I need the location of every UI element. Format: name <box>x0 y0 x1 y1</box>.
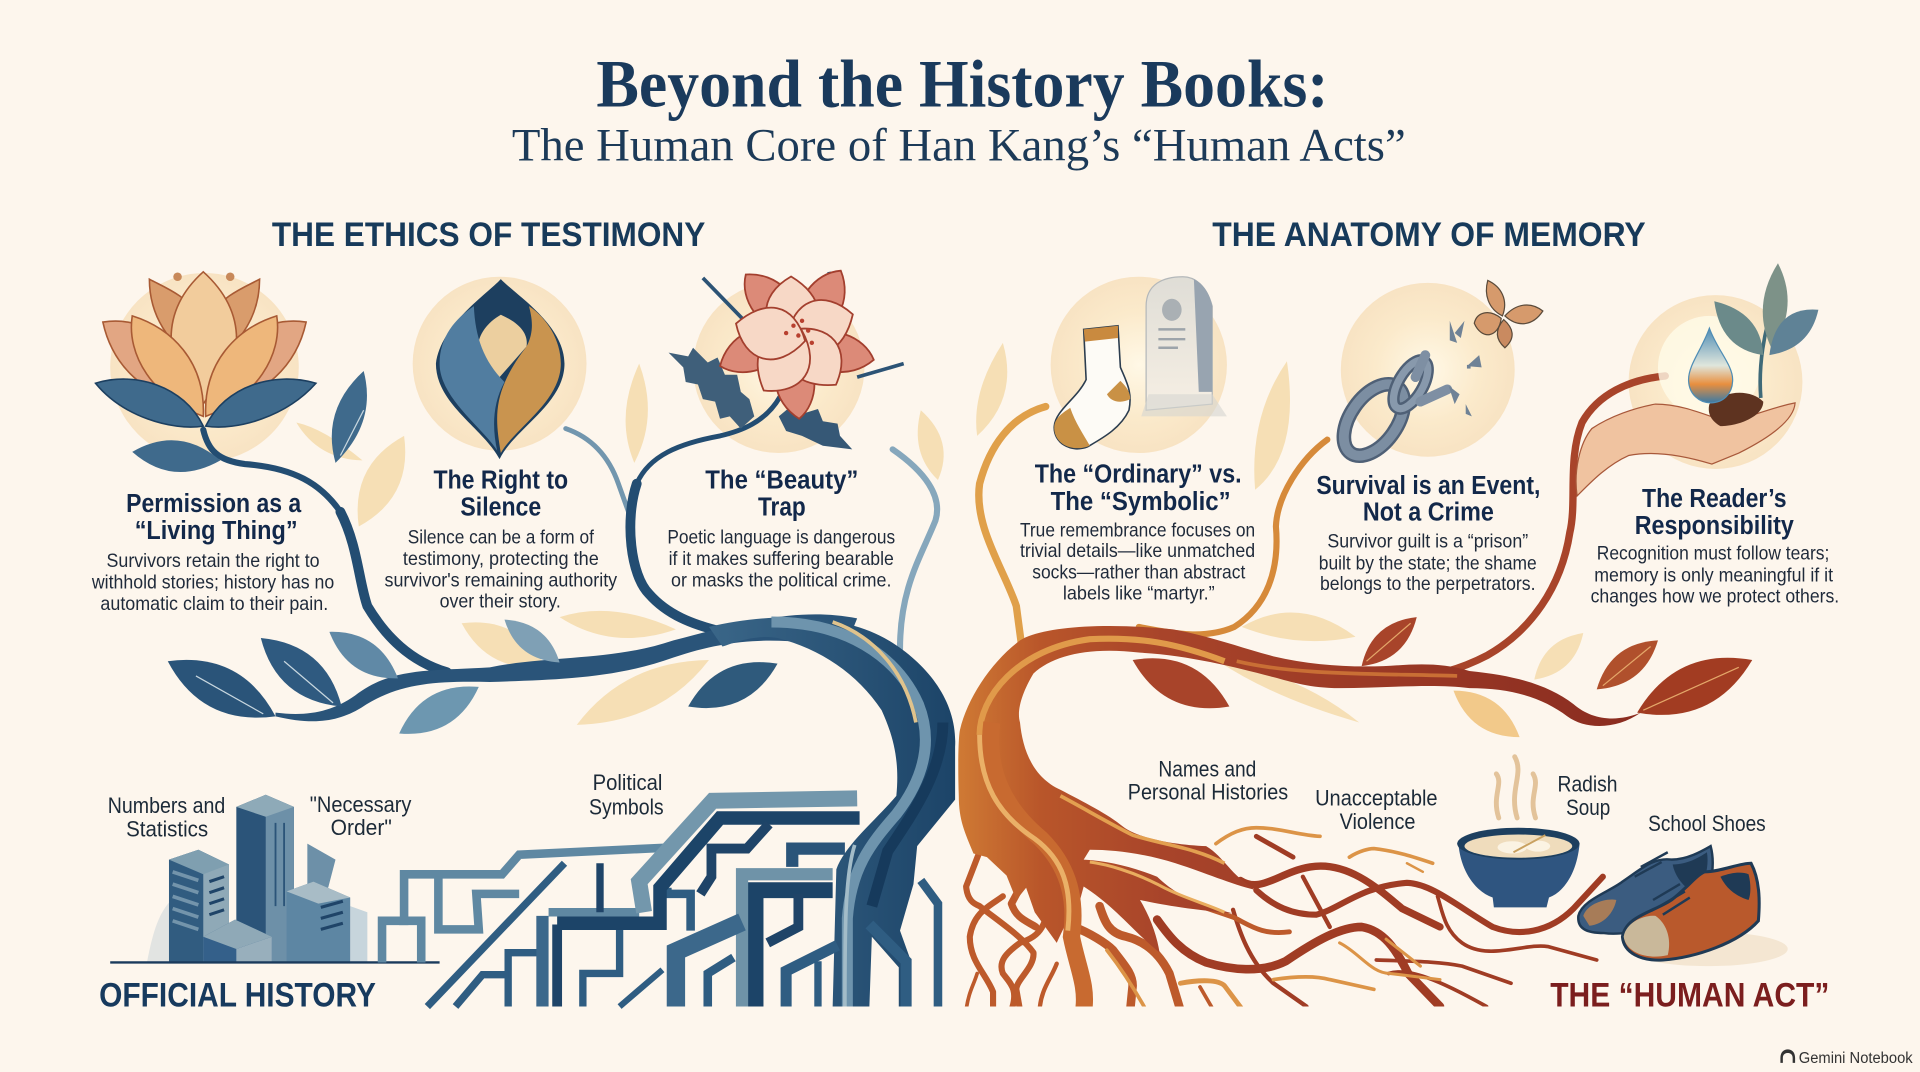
blue leaves <box>132 371 778 734</box>
text: ordinary vs symbolic: labels like “martyr.” <box>1063 583 1215 604</box>
icon: school shoes <box>1578 846 1788 966</box>
root strands: dark <box>1157 836 1603 1007</box>
labels: human act side: Personal Histories <box>1128 780 1288 805</box>
root strands: light orange <box>1107 828 1440 1010</box>
text: the reader's responsibility: changes how we protect others. <box>1591 586 1839 607</box>
heading: the anatomy of memory: THE ANATOMY OF MEMORY <box>1212 216 1646 254</box>
watermark: gemini notebook: Gemini Notebook <box>1799 1050 1913 1067</box>
labels: human act side <box>1128 756 1766 836</box>
text: the right to silence: Silence <box>460 492 541 522</box>
red leaves <box>1133 617 1752 715</box>
text: permission as a living thing: “Living Thing” <box>135 515 298 545</box>
labels: human act side: Soup <box>1566 795 1610 820</box>
labels: official history side: "Necessary <box>310 792 411 817</box>
title: Beyond the History Books: <box>596 47 1329 122</box>
text: survival is an event: Survival is an Event, <box>1316 470 1540 500</box>
labels: human act side: Radish <box>1558 772 1618 797</box>
text: ordinary vs symbolic: The “Ordinary” vs. <box>1035 458 1242 488</box>
labels: human act side: Names and <box>1158 756 1256 781</box>
text: survival is an event: Survivor guilt is a “prison” <box>1327 531 1528 552</box>
text: the beauty trap: The “Beauty” <box>705 465 858 495</box>
text: the right to silence: over their story. <box>440 591 561 612</box>
labels: official history side: Numbers and <box>108 793 225 818</box>
text: the beauty trap: Poetic language is dangerous <box>667 528 895 549</box>
heading: the ethics of testimony: THE ETHICS OF TESTIMONY <box>272 216 705 254</box>
icon: lotus flower <box>96 272 316 427</box>
text: the right to silence <box>384 465 618 612</box>
text: survival is an event: Not a Crime <box>1363 496 1494 526</box>
heading: official history: OFFICIAL HISTORY <box>99 977 376 1015</box>
text: survival is an event <box>1316 470 1540 595</box>
labels: official history side: Symbols <box>589 794 664 819</box>
text: the reader's responsibility: Responsibility <box>1635 510 1794 540</box>
text: the right to silence: Silence can be a form of <box>408 528 595 549</box>
icon: sock and gravestone <box>1054 277 1227 449</box>
icon: hand holding tear and sprout <box>1576 263 1818 496</box>
text: survival is an event: belongs to the perpetrators. <box>1320 574 1536 595</box>
root strands: mid orange <box>963 854 1292 1006</box>
text: the right to silence: survivor's remaining authority <box>384 571 618 592</box>
text: the beauty trap: if it makes suffering bearable <box>669 549 894 570</box>
text: permission as a living thing: Permission as a <box>126 488 302 518</box>
title <box>512 47 1406 171</box>
labels: human act side: Violence <box>1340 809 1416 834</box>
text: the beauty trap: or masks the political crime. <box>671 571 891 592</box>
text: the reader's responsibility <box>1591 483 1839 607</box>
labels: human act side: Unacceptable <box>1315 786 1438 811</box>
text: the beauty trap <box>667 465 895 592</box>
text: ordinary vs symbolic: socks—rather than abstract <box>1032 563 1246 584</box>
heading: the human act: THE “HUMAN ACT” <box>1550 977 1829 1015</box>
labels: official history side: Political <box>593 770 662 795</box>
icon: broken chain and butterfly <box>1332 280 1543 466</box>
blue tree: main branch and trunk <box>276 614 955 1007</box>
text: the reader's responsibility: Recognition must follow tears; <box>1597 544 1829 565</box>
icon: soup bowl with steam <box>1457 757 1580 907</box>
medallion circles <box>110 273 1802 469</box>
pale yellow leaves <box>296 343 1583 737</box>
icon: closed bud <box>436 279 564 459</box>
text: the beauty trap: Trap <box>758 492 806 522</box>
blue tree: branches <box>203 397 937 672</box>
text: the right to silence: The Right to <box>433 465 568 495</box>
title: The Human Core of Han Kang’s “Human Acts” <box>512 120 1406 171</box>
icon: thorned flower <box>669 261 904 449</box>
text: ordinary vs symbolic: trivial details—like unmatched <box>1020 541 1255 562</box>
text: permission as a living thing: Survivors retain the right to <box>107 551 320 572</box>
text: ordinary vs symbolic: True remembrance focuses on <box>1020 520 1255 541</box>
text: the reader's responsibility: The Reader’s <box>1642 483 1787 513</box>
labels: official history side <box>108 770 664 841</box>
text: survival is an event: built by the state; the shame <box>1319 553 1537 574</box>
red tree: upper branches <box>979 376 1665 678</box>
maze: mid lines <box>427 863 938 1007</box>
text: permission as a living thing <box>91 488 334 615</box>
maze: light outer lines <box>382 847 673 962</box>
text: ordinary vs symbolic: The “Symbolic” <box>1051 486 1231 516</box>
text: permission as a living thing: automatic claim to their pain. <box>100 594 328 615</box>
maze of official history roots <box>382 798 938 1007</box>
maze: thick central bands <box>542 798 860 1007</box>
text: the right to silence: testimony, protecting the <box>403 549 599 570</box>
text: the reader's responsibility: memory is only meaningful if it <box>1594 566 1834 587</box>
icon: city buildings <box>110 795 440 962</box>
human roots, clipped at the base line <box>966 828 1603 1010</box>
text: permission as a living thing: withhold stories; history has no <box>91 572 334 593</box>
labels: human act side: School Shoes <box>1648 811 1766 836</box>
red tree: main branch, trunk and root mass <box>958 626 1641 1010</box>
text: ordinary vs symbolic <box>1020 458 1255 604</box>
labels: official history side: Statistics <box>126 816 208 841</box>
labels: official history side: Order" <box>331 815 392 840</box>
